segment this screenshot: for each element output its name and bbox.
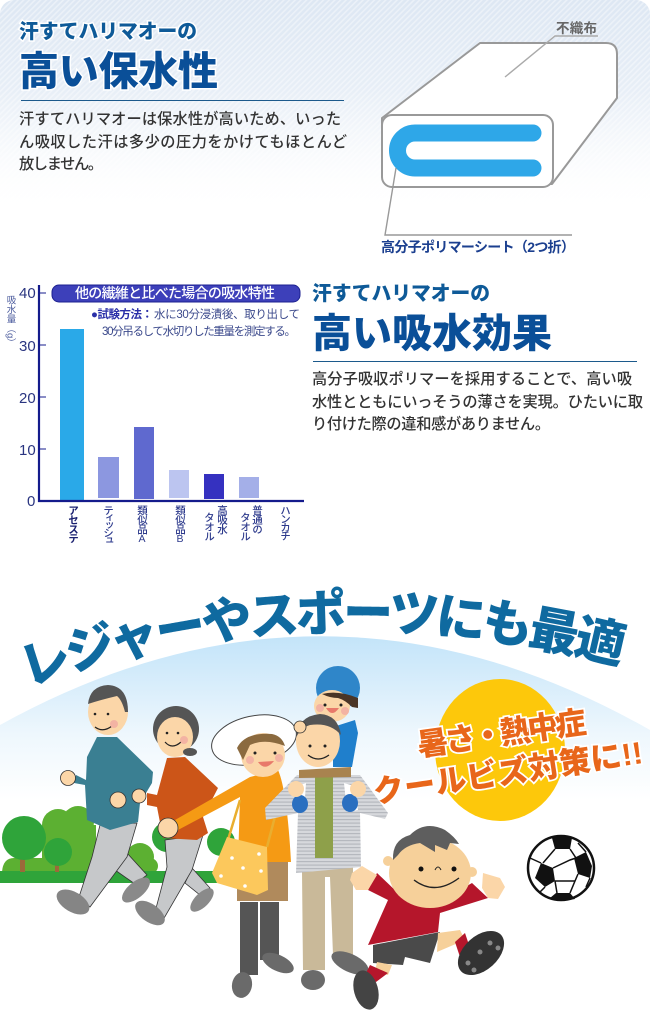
- illustration: boy kicking: [349, 826, 512, 1012]
- category labels: 高吸水: [216, 504, 228, 535]
- illustration: woman in sun hat with bag: [158, 708, 301, 1000]
- axis numbers: 40: [19, 285, 36, 302]
- label: nonwoven fabric: 不織布: [556, 20, 597, 36]
- illustration: walking woman in rust jacket: [131, 706, 218, 930]
- bar chart: water absorption by material: [4, 285, 304, 544]
- category labels: タオル: [203, 512, 215, 541]
- axis numbers: 20: [19, 390, 36, 407]
- axis numbers: 0: [27, 493, 35, 510]
- icon: cleat sole: [450, 922, 512, 984]
- axis numbers: 10: [19, 442, 36, 459]
- test method note: 水に30分浸漬後、取り出して: [154, 307, 300, 321]
- chart title pill: 他の繊維と比べた場合の吸水特性: [75, 285, 275, 301]
- axis title: 吸水量（g）: [4, 295, 16, 348]
- label: polymer sheet: 高分子ポリマーシート（2つ折）: [381, 239, 575, 255]
- category labels: 類似品A: [136, 504, 148, 544]
- title: curved leisure and sports: レジャーやスポーツにも最適: [24, 586, 628, 684]
- category labels: ハンカチ: [279, 505, 291, 541]
- icon: yellow sun: [435, 679, 565, 821]
- diagram: nonwoven fabric body: [382, 43, 617, 184]
- text block: retention description: 放しません。: [19, 156, 103, 173]
- test method note: [91, 307, 300, 338]
- heading: high water retention: 高い保水性: [19, 50, 218, 94]
- diagram: folded polymer sheet cross-section: [381, 20, 617, 255]
- illustration: trees and ground: [0, 806, 235, 883]
- text block: absorption description: 高分子吸収ポリマーを採用することで、高い吸: [312, 371, 632, 388]
- text block: retention description: ん吸収した汗は多少の圧力をかけてもほとんど: [19, 133, 347, 151]
- panel: sky arc background: [0, 636, 650, 800]
- icon: polka-dot shoulder bag: [212, 800, 278, 895]
- test method note: 30分吊るして水切りした重量を測定する。: [102, 324, 296, 338]
- panel: water retention copy: [19, 21, 347, 173]
- text block: absorption description: り付けた際の違和感がありません。: [312, 415, 550, 433]
- callout: heat and cool biz: 暑さ・熱中症: [415, 705, 588, 763]
- heading: product name: 汗すてハリマオーの: [312, 283, 490, 305]
- child on shoulders: [292, 666, 360, 813]
- diagram: polymer sheet folded in two: [398, 133, 533, 168]
- panel: top background: [0, 0, 650, 215]
- text block: retention description: 汗すてハリマオーは保水性が高いため、いった: [19, 110, 341, 128]
- illustration: father carrying child on shoulders: [265, 666, 388, 990]
- category labels: [67, 504, 291, 544]
- axis numbers: 30: [19, 338, 36, 355]
- category labels: ティッシュ: [102, 505, 114, 543]
- text block: absorption description: 水性とともにいっそうの薄さを実現。ひたいに取: [312, 394, 643, 411]
- hands: [350, 866, 505, 899]
- shirt and shorts: [368, 873, 488, 965]
- text block: absorption description: [312, 371, 643, 433]
- test method note: ●試験方法：: [91, 307, 153, 321]
- illustration: walking man in teal jacket: [52, 685, 154, 920]
- category labels: タオル: [239, 512, 251, 541]
- chart bars: [60, 329, 259, 500]
- text block: retention description: [19, 110, 347, 173]
- axis numbers: [19, 285, 36, 510]
- heading: product name: 汗すてハリマオーの: [19, 21, 197, 43]
- category labels: アセステ: [67, 505, 79, 543]
- category labels: 類似品B: [174, 504, 186, 544]
- icon: soccer ball: [528, 836, 594, 900]
- heading: high absorption: 高い吸水効果: [312, 312, 552, 356]
- category labels: 普通の: [251, 504, 263, 534]
- panel: water absorption copy: [312, 283, 643, 433]
- callout: heat and cool biz: クールビズ対策に!!: [371, 735, 645, 810]
